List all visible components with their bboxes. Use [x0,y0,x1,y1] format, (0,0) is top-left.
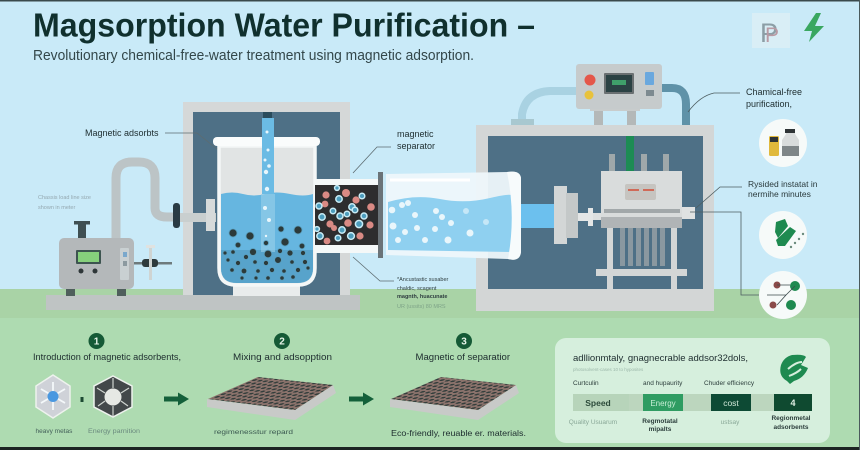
label: faint pump note 2: shown in meter [38,205,75,211]
background: lower process band [0,318,860,450]
metric strip: Energy [650,399,676,408]
filter unit [596,136,695,290]
logo: green bolt [804,13,824,42]
label: magnetic separator [353,129,435,173]
clear transfer tube [386,172,521,260]
panel heading: adllionmtaly, gnagnecrable addsor32dols, [573,353,748,364]
pump unit [59,221,172,296]
step 3: Magnetic of separatior [416,352,510,362]
column labels: Curtculin [573,380,599,387]
connector to network icon [690,212,760,295]
icon: green leaf badge [780,355,808,384]
logo: P mark: P [765,24,779,47]
label: rapid treatment [696,179,818,208]
step 2: 2 [279,336,285,348]
machine base [46,295,360,310]
inlet spout [263,112,272,119]
plus separator [80,397,84,402]
label: chemical-free purification [688,87,802,112]
plate [390,377,519,420]
logo: P mark [752,13,790,48]
icon: chemical bottles [759,119,807,167]
sub labels: ustsay [721,419,740,426]
label: magnetic separator: magnetic [397,129,434,139]
label: small separator note: chaldic, scagent [397,286,437,292]
right housing frame [476,125,714,311]
step 1: 1 [94,336,100,348]
step 3 [390,333,526,438]
label: chemical-free purification: purification, [746,99,792,109]
step 2: Mixing and adsopption [233,352,332,362]
arrow: step 1 to 2 [164,392,189,406]
step 1 [33,333,189,435]
label: magnetic adsorbents: Magnetic adsorbts [85,128,159,138]
sub labels: mipalts [649,426,672,433]
caption: energy: Energy parnition [88,429,140,435]
separator particles [315,186,375,244]
label: magnetic separator: separator [397,141,435,151]
sub labels: Regmotatal [642,418,678,425]
label: small separator note: magnth, huacunate [397,294,447,300]
label: rapid treatment: nermihe minutes [748,189,811,199]
sub labels: adsorbents [773,424,809,431]
label: small separator note: *Ancustastic susaber [397,277,449,283]
metric strip: cost [723,398,739,408]
label: magnetic adsorbents [85,128,217,149]
column labels: Chuder efficiency [704,380,755,387]
background: sky [0,0,860,290]
column labels [573,380,755,387]
plate [207,377,336,420]
subtitle: Revolutionary chemical-free-water treatment using magnetic adsorption. [33,48,474,64]
label: faint pump note: Chassis load line size [38,195,91,201]
metric strip: 4 [790,398,796,408]
sub labels: Regionmetal [771,415,811,422]
adsorbent particles [223,226,310,280]
metric strip: Speed [585,398,611,408]
panel note: photosolvent-cases 10 to hyposites [573,367,644,372]
magnetic separator [314,172,383,258]
column labels: and hupaurity [643,380,683,387]
left housing frame [183,102,350,296]
arrow: step 2 to 3 [349,392,374,406]
pump pipe [116,162,216,240]
label: small separator note: UR (ussits) 80 MRS [397,304,446,310]
control panel [576,64,662,125]
step 3: 3 [461,336,467,348]
icon: network nodes [759,271,807,319]
beaker [213,118,320,285]
caption: Eco-friendly, reuable er. materials. [391,428,526,438]
caption: regimenesstur repard [214,429,293,436]
label: chemical-free purification: Chamical-free [746,87,802,97]
title: Magsorption Water Purification – [33,6,535,44]
label: small separator note [353,257,449,310]
label: rapid treatment: Rysided instatat in [748,179,818,189]
water stream [261,118,275,252]
background: ground [0,289,860,450]
step 2 [207,333,374,436]
icon: dark adsorbent hexagon [94,376,132,417]
sub labels [569,415,811,433]
control pipes [511,88,686,125]
icon: green leaf blocks [759,211,807,259]
sub labels: Quality Usuarum [569,419,617,426]
filter outlet assembly [521,186,605,244]
logo: P mark: P [760,18,778,48]
panel: comparison [555,338,830,443]
metric strip [573,394,812,411]
caption: heavy metals: heavy metas [36,428,73,435]
icon: heavy metal hexagon [36,375,70,418]
step 1: Introduction of magnetic adsorbents, [33,352,181,362]
